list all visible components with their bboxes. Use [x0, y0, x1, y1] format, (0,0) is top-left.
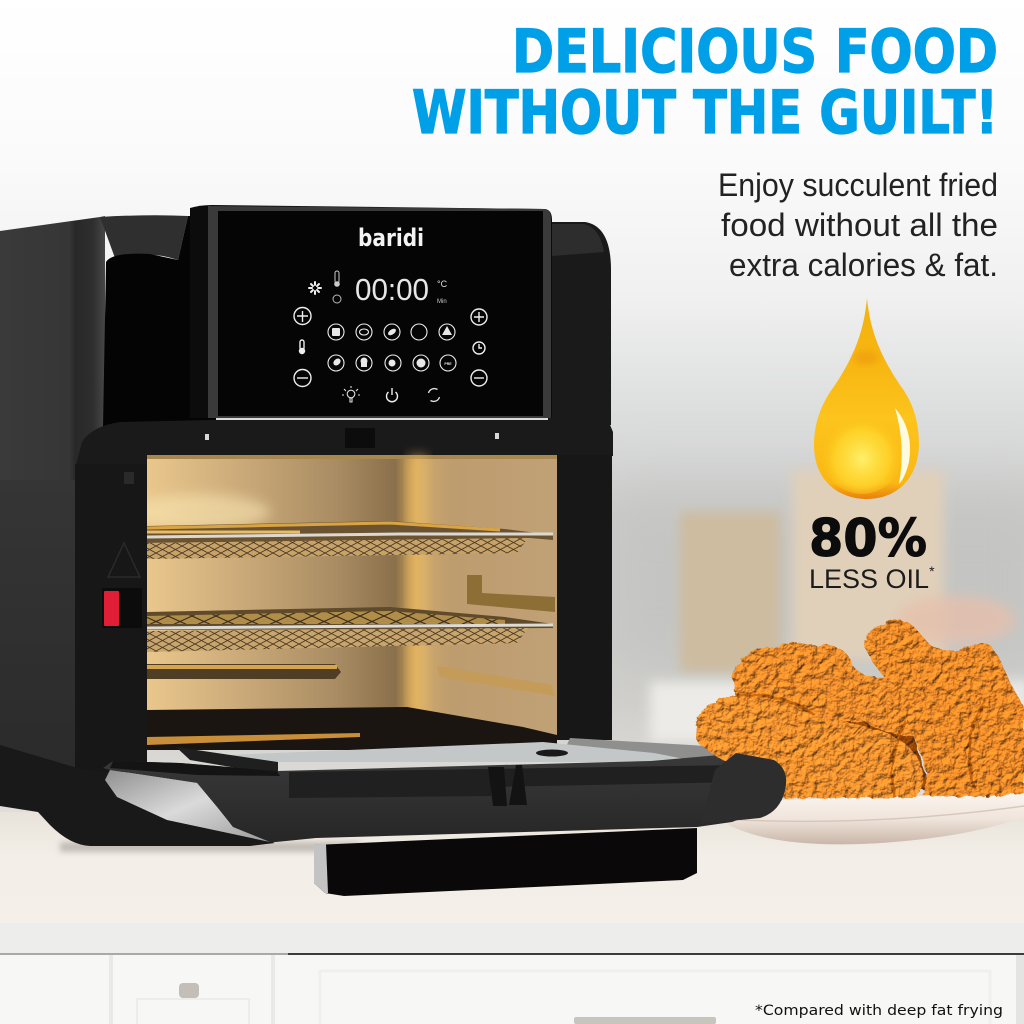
fryer lower side — [0, 480, 76, 770]
icon: oil drop — [814, 298, 919, 499]
fryer upper side — [0, 216, 105, 482]
interior ceiling edge — [147, 455, 557, 459]
fryer glossy front — [103, 216, 216, 428]
door frame right post — [557, 455, 612, 740]
fryer right shoulder — [548, 222, 611, 425]
celsius unit: °C — [437, 279, 448, 289]
door glass window — [228, 742, 700, 762]
door left notch — [488, 767, 507, 806]
right guide rail — [437, 666, 555, 696]
statistic label: less oil: LESS OIL — [809, 564, 929, 594]
door frame left post — [75, 464, 147, 772]
icon: light bulb — [342, 386, 360, 402]
title — [412, 17, 998, 148]
tray golden reflection — [147, 733, 360, 745]
brand logo: baridi — [358, 224, 424, 252]
chicken piece: back — [732, 642, 917, 737]
warm glow above rack — [130, 494, 270, 530]
chicken crevice lines — [735, 695, 985, 798]
shoulder highlight — [552, 224, 604, 256]
fryer shadow on counter — [60, 842, 360, 852]
control panel — [190, 205, 552, 418]
drip tray — [147, 707, 557, 750]
statistic: 80 percent: 80% — [809, 509, 927, 569]
rack bracket — [467, 575, 555, 612]
chicken piece: right drumstick — [863, 620, 1024, 797]
description text: Enjoy succulent fried — [718, 167, 998, 203]
interior right wall — [417, 456, 557, 746]
chicken piece: front — [696, 695, 923, 798]
footnote: *Compared with deep fat frying — [755, 1003, 1003, 1019]
warning triangle mark — [108, 543, 140, 577]
interior back wall — [147, 456, 417, 746]
door recessed band — [289, 765, 744, 798]
air fryer — [0, 205, 786, 896]
fryer glossy top — [100, 215, 188, 260]
icon: fan — [309, 282, 321, 294]
left rail highlight — [147, 665, 337, 669]
door top highlight — [110, 761, 280, 776]
chicken shadow gap — [800, 690, 930, 790]
door silver end cap — [105, 770, 270, 842]
door handle glass — [314, 828, 697, 896]
frame hinge ticks — [205, 433, 499, 440]
left guide rail — [147, 664, 341, 679]
upper rack — [147, 521, 553, 559]
preheat button label: PRE — [444, 362, 452, 366]
frame centre latch — [345, 428, 375, 448]
door main body — [103, 753, 786, 842]
power switch — [102, 588, 142, 628]
door frame top rail — [76, 420, 613, 465]
handle silver edge — [314, 844, 328, 893]
white cabinets — [0, 923, 1024, 1024]
minutes unit: Min — [437, 299, 447, 305]
description text — [718, 167, 998, 283]
temperature and time adjust buttons — [294, 308, 487, 386]
frame clip — [124, 472, 134, 484]
cabinet knob — [179, 983, 199, 998]
door glass knob — [536, 750, 568, 756]
door end overlapping the chicken — [700, 753, 786, 824]
door rear rim — [560, 738, 724, 760]
door rear lip — [176, 747, 278, 775]
icon: power — [387, 388, 398, 402]
kitchen countertop — [0, 812, 1024, 923]
preset food buttons — [328, 324, 456, 371]
statistic label: less oil: * — [929, 563, 935, 579]
lower rack — [147, 607, 553, 652]
description text: extra calories & fat. — [729, 247, 998, 283]
oven interior — [130, 455, 557, 750]
timer display: 00:00 — [355, 272, 429, 307]
icon: thermometer display — [334, 271, 340, 287]
plate — [727, 793, 1024, 844]
fried chicken — [696, 620, 1024, 798]
icon: rotation — [428, 389, 440, 401]
cabinet bar handle — [574, 1017, 716, 1024]
door right notch — [509, 765, 527, 805]
corner light glow — [409, 456, 427, 716]
icon: alarm clock — [333, 295, 341, 303]
open oven door — [103, 738, 786, 896]
description text: food without all the — [721, 207, 998, 243]
fryer base — [0, 745, 275, 846]
